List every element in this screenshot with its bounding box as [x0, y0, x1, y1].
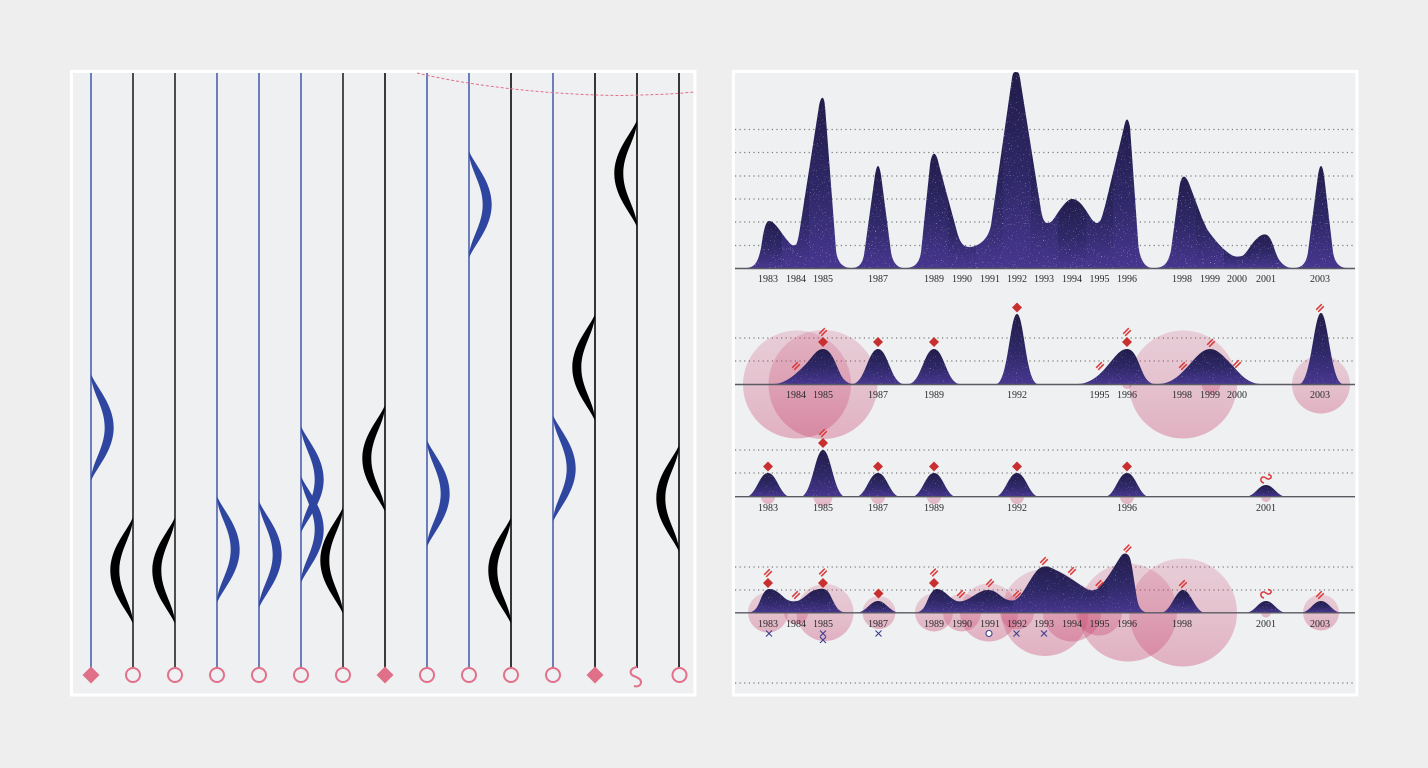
year labels: 1998 [1172, 619, 1192, 630]
year labels [758, 274, 1330, 285]
year labels: 1985 [813, 503, 833, 514]
year labels: 1990 [952, 274, 972, 285]
year labels: 1998 [1172, 390, 1192, 401]
black strand bulges [110, 120, 679, 624]
year labels: 2001 [1256, 503, 1276, 514]
year labels: 1998 [1172, 274, 1192, 285]
year labels [786, 390, 1330, 401]
year labels: 1984 [786, 619, 806, 630]
year labels: 1995 [1090, 619, 1110, 630]
year labels: 1984 [786, 390, 806, 401]
year labels: 1996 [1117, 274, 1137, 285]
year labels: 1989 [924, 390, 944, 401]
area [745, 72, 1348, 268]
year labels: 1989 [924, 274, 944, 285]
chart row 3 [735, 429, 1355, 514]
dashed arc [417, 73, 694, 96]
year labels: 2003 [1310, 274, 1330, 285]
year labels [758, 619, 1330, 630]
year labels: 1993 [1034, 619, 1054, 630]
strand end markers [82, 666, 686, 686]
chart row 4 [735, 545, 1355, 683]
year labels: 1987 [868, 390, 888, 401]
year labels: 1983 [758, 503, 778, 514]
year labels: 1987 [868, 619, 888, 630]
bubbles [748, 558, 1339, 666]
year labels [758, 503, 1276, 514]
year labels: 1999 [1200, 390, 1220, 401]
year labels: 1992 [1007, 619, 1027, 630]
year labels: 2001 [1256, 274, 1276, 285]
year labels: 1983 [758, 619, 778, 630]
grid lines [735, 338, 1355, 361]
year labels: 1987 [868, 274, 888, 285]
strand lines [91, 73, 679, 668]
grid lines [735, 130, 1355, 246]
area [770, 313, 1345, 384]
year labels: 1994 [1062, 619, 1082, 630]
year labels: 1991 [980, 619, 1000, 630]
grid lines [735, 567, 1355, 683]
year labels: 1995 [1090, 274, 1110, 285]
year labels: 1995 [1090, 390, 1110, 401]
year labels: 1984 [786, 274, 806, 285]
year labels: 2001 [1256, 619, 1276, 630]
year labels: 1992 [1007, 274, 1027, 285]
area [743, 450, 1290, 497]
year labels: 1996 [1117, 503, 1137, 514]
year labels: 1994 [1062, 274, 1082, 285]
year labels: 1993 [1034, 274, 1054, 285]
markers [763, 545, 1324, 643]
bubbles [743, 330, 1350, 439]
year labels: 2003 [1310, 619, 1330, 630]
year labels: 1989 [924, 619, 944, 630]
year labels: 1996 [1117, 390, 1137, 401]
year labels: 1991 [980, 274, 1000, 285]
year labels: 1992 [1007, 390, 1027, 401]
bubbles [761, 488, 1271, 506]
year labels: 1985 [813, 619, 833, 630]
area [743, 552, 1345, 613]
year labels: 2003 [1310, 390, 1330, 401]
panel: strand timeline [71, 71, 695, 695]
year labels: 1985 [813, 274, 833, 285]
panel: yearly density charts [733, 71, 1357, 695]
year labels: 1996 [1117, 619, 1137, 630]
year labels: 1990 [952, 619, 972, 630]
chart row 2 [735, 302, 1355, 439]
year labels: 1989 [924, 503, 944, 514]
year labels: 1983 [758, 274, 778, 285]
blue strand bulges [91, 151, 576, 608]
year labels: 1987 [868, 503, 888, 514]
markers [763, 429, 1271, 483]
chart row 1: all years [735, 72, 1355, 285]
markers [792, 302, 1324, 370]
year labels: 1985 [813, 390, 833, 401]
year labels: 1992 [1007, 503, 1027, 514]
year labels: 2000 [1227, 274, 1247, 285]
year labels: 1999 [1200, 274, 1220, 285]
year labels: 2000 [1227, 390, 1247, 401]
grid lines [735, 450, 1355, 473]
